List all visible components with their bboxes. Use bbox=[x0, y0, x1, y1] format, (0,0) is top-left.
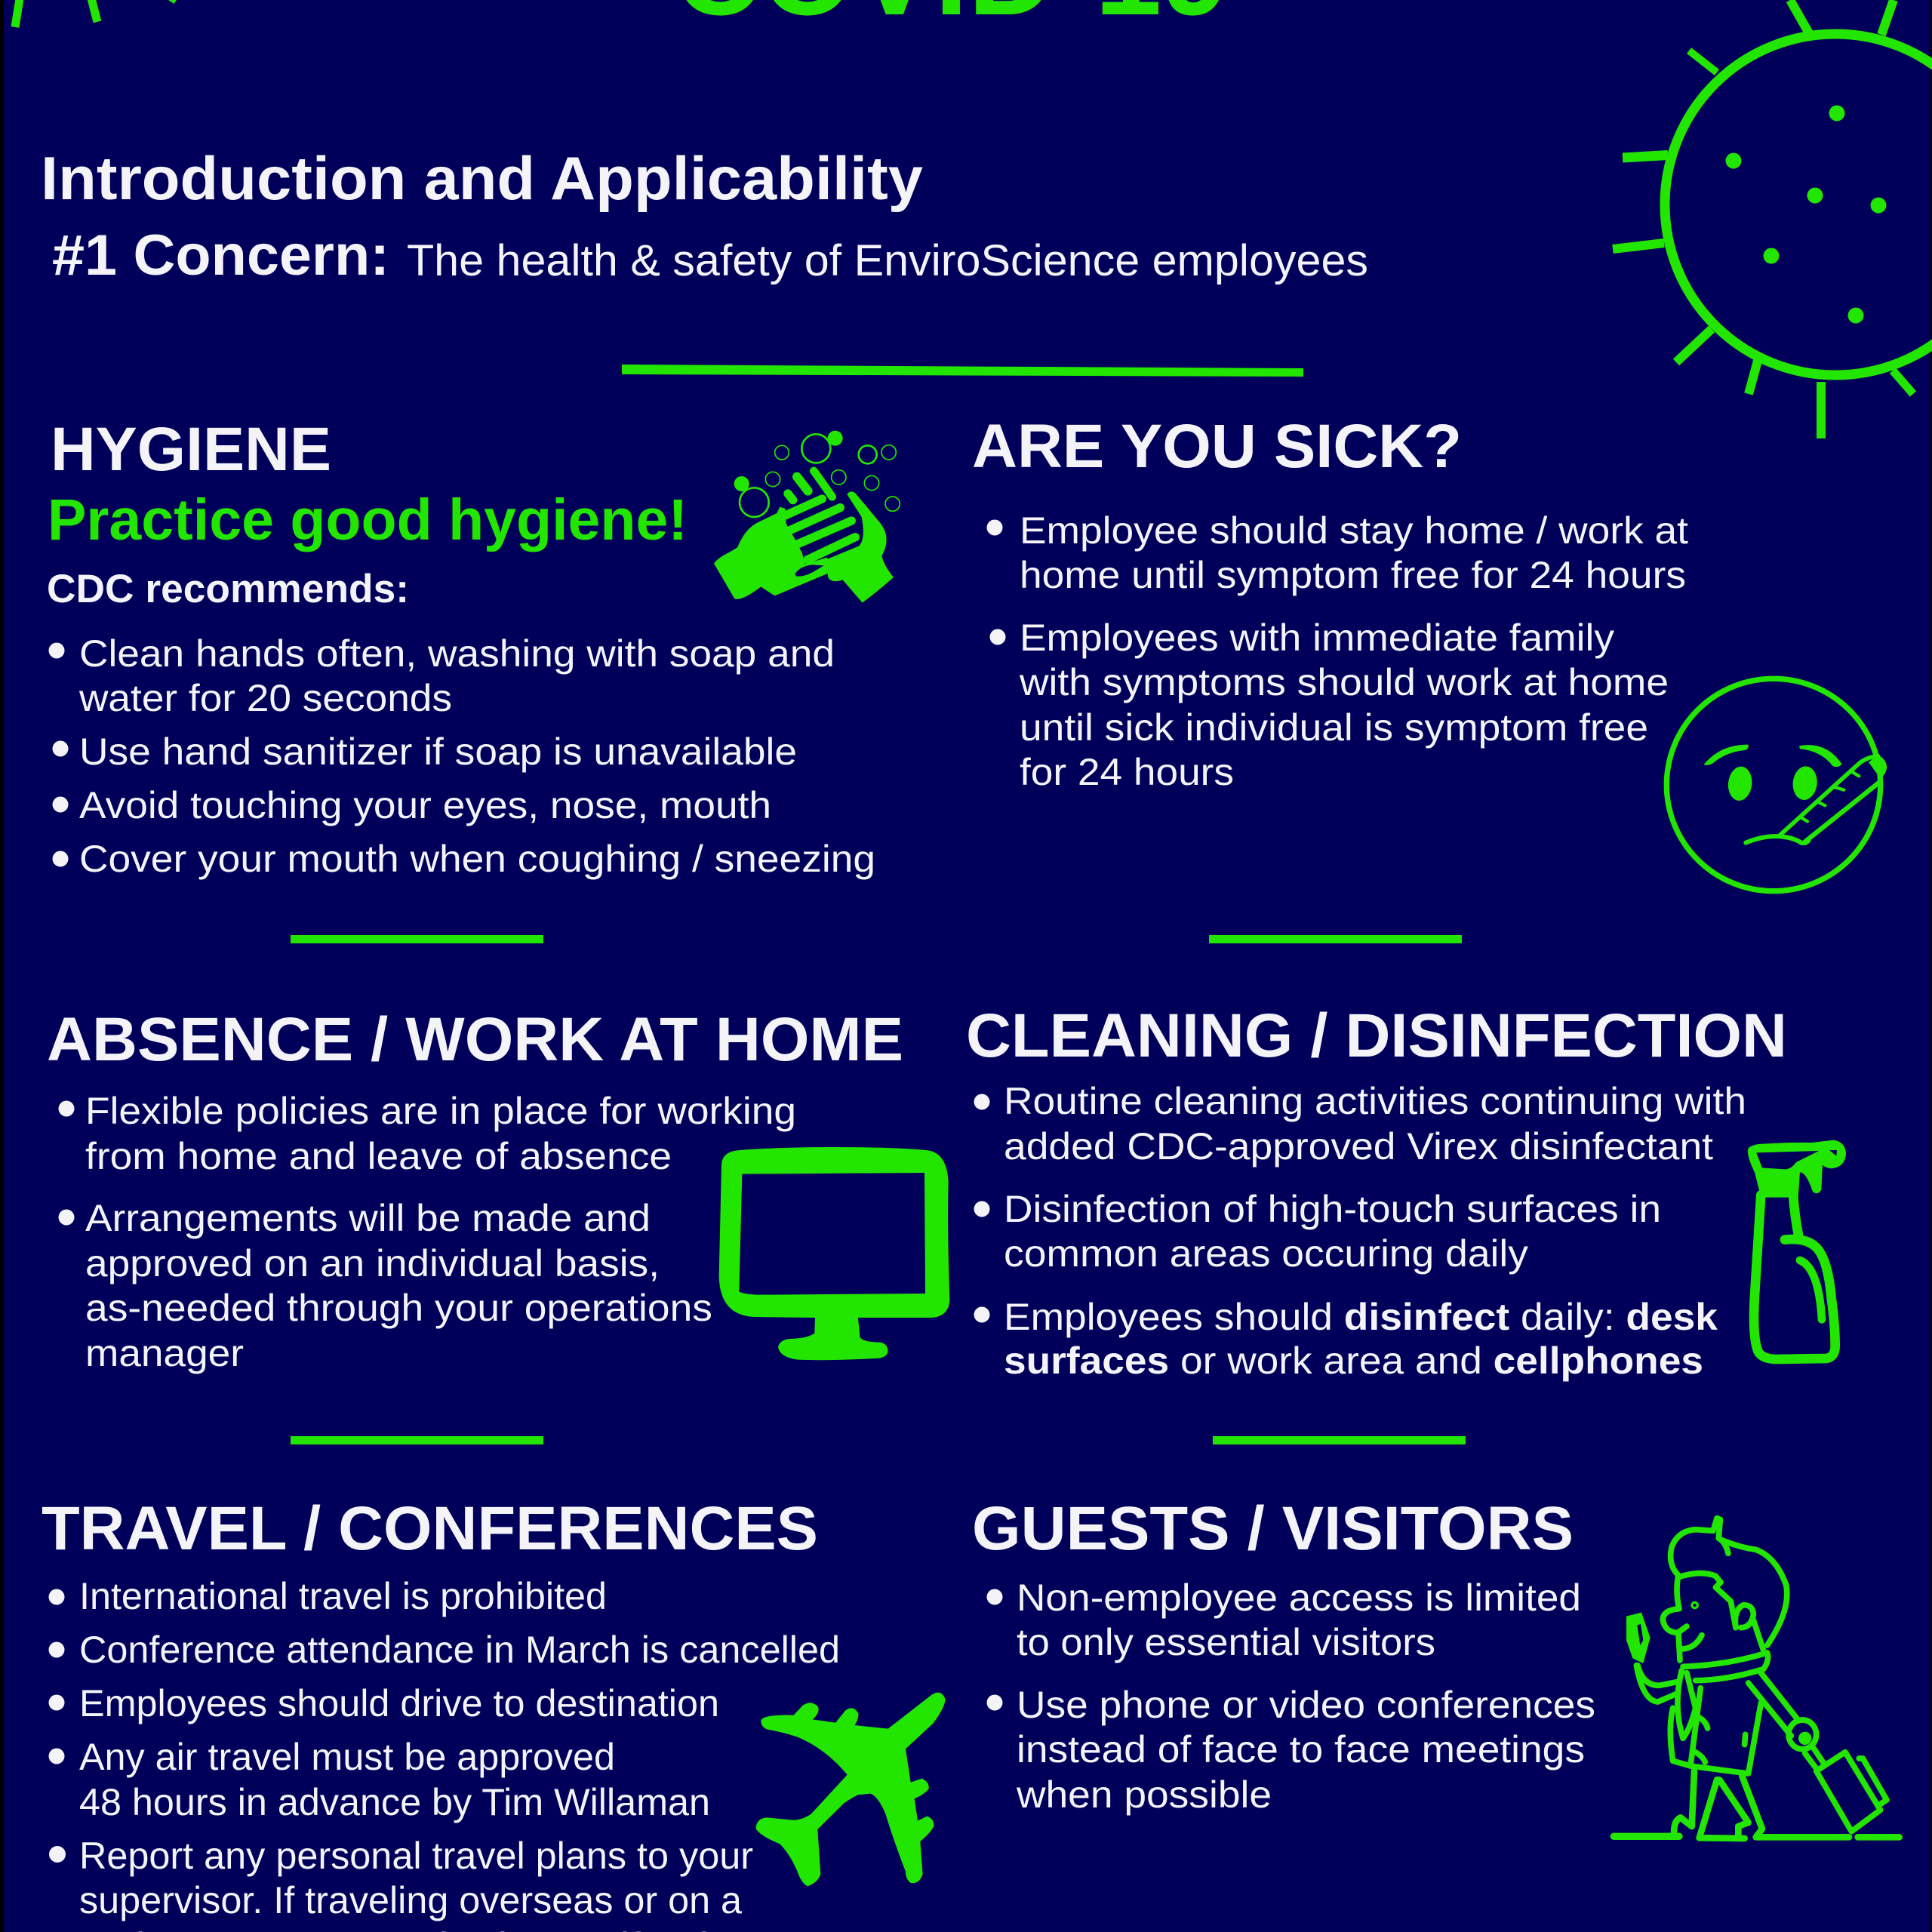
divider left row 2 bbox=[291, 1436, 543, 1444]
intro heading: Introduction and Applicability bbox=[41, 145, 923, 213]
absence list: Flexible policies are in place for working bbox=[85, 1090, 796, 1132]
hygiene subheading: Practice good hygiene! bbox=[48, 488, 688, 552]
divider right row 2 bbox=[1213, 1436, 1466, 1444]
icon: virus top left bbox=[15, 0, 174, 27]
panel: hygiene bbox=[47, 415, 900, 880]
panel: guests / visitors bbox=[972, 1494, 1900, 1838]
icon: spray bottle bbox=[1748, 1140, 1846, 1359]
icon: sick face with thermometer bbox=[1666, 678, 1887, 891]
cleaning heading: CLEANING / DISINFECTION bbox=[966, 1001, 1787, 1070]
travel list bbox=[48, 1575, 840, 1932]
icon: computer monitor bbox=[719, 1147, 949, 1360]
divider right row 1 bbox=[1209, 935, 1462, 943]
absence list: from home and leave of absence bbox=[85, 1135, 672, 1177]
hygiene heading: HYGIENE bbox=[51, 415, 331, 484]
cleaning list: surfaces or work area and cellphones bbox=[1004, 1340, 1703, 1382]
cleaning list: common areas occuring daily bbox=[1004, 1232, 1528, 1275]
travel heading: TRAVEL / CONFERENCES bbox=[42, 1494, 818, 1563]
absence list: manager bbox=[85, 1332, 244, 1374]
guests list: Use phone or video conferences bbox=[1017, 1684, 1595, 1726]
sick list: for 24 hours bbox=[1020, 751, 1234, 793]
travel list: International travel is prohibited bbox=[79, 1575, 607, 1617]
hygiene list: water for 20 seconds bbox=[78, 677, 452, 719]
panel: absence / work at home bbox=[47, 1005, 949, 1374]
panel: travel / conferences bbox=[42, 1494, 946, 1932]
guests list: instead of face to face meetings bbox=[1017, 1728, 1585, 1770]
cleaning list: Disinfection of high-touch surfaces in bbox=[1004, 1188, 1661, 1230]
cleaning list: Employees should disinfect daily: desk bbox=[1004, 1296, 1718, 1338]
sick heading: ARE YOU SICK? bbox=[972, 412, 1462, 481]
absence list: approved on an individual basis, bbox=[85, 1242, 660, 1284]
guests list: Non-employee access is limited bbox=[1017, 1577, 1581, 1619]
hygiene list: Avoid touching your eyes, nose, mouth bbox=[79, 784, 771, 826]
cdc label: CDC recommends: bbox=[47, 567, 409, 611]
guests list: to only essential visitors bbox=[1017, 1621, 1435, 1663]
icon: airplane bbox=[756, 1693, 946, 1886]
right hand bbox=[827, 491, 894, 603]
travel list: 48 hours in advance by Tim Willaman bbox=[79, 1781, 710, 1823]
cleaning list: Routine cleaning activities continuing with bbox=[1004, 1080, 1746, 1122]
travel list: Employees should drive to destination bbox=[79, 1682, 719, 1724]
hygiene list: Use hand sanitizer if soap is unavailable bbox=[79, 731, 797, 773]
concern label: #1 Concern: bbox=[52, 223, 389, 288]
concern text: The health & safety of EnviroScience employees bbox=[407, 236, 1368, 285]
sick list: until sick individual is symptom free bbox=[1020, 706, 1648, 749]
sick list: home until symptom free for 24 hours bbox=[1020, 554, 1686, 596]
icon: traveler with suitcase bbox=[1614, 1518, 1900, 1838]
travel list: supervisor. If traveling overseas or on a bbox=[79, 1879, 742, 1921]
cleaning list: added CDC-approved Virex disinfectant bbox=[1004, 1125, 1713, 1168]
divider left row 1 bbox=[291, 935, 543, 943]
hygiene list: Clean hands often, washing with soap and bbox=[79, 632, 835, 675]
divider top bbox=[622, 365, 1303, 377]
sick list bbox=[987, 509, 1688, 793]
absence list: as-needed through your operations bbox=[85, 1287, 712, 1329]
absence list: Arrangements will be made and bbox=[85, 1197, 651, 1239]
travel list: Any air travel must be approved bbox=[79, 1736, 615, 1778]
icon: washing hands bbox=[714, 431, 900, 603]
hygiene list: Cover your mouth when coughing / sneezing bbox=[79, 838, 875, 880]
guests list: when possible bbox=[1016, 1774, 1272, 1816]
sick list: Employees with immediate family bbox=[1020, 617, 1614, 659]
travel list: Report any personal travel plans to your bbox=[79, 1835, 753, 1877]
guests list bbox=[987, 1577, 1595, 1816]
absence heading: ABSENCE / WORK AT HOME bbox=[47, 1005, 903, 1074]
icon: virus top right bbox=[1613, 0, 1932, 438]
hygiene list bbox=[48, 632, 875, 880]
panel: cleaning / disinfection bbox=[966, 1001, 1846, 1382]
absence list bbox=[59, 1090, 796, 1374]
guests heading: GUESTS / VISITORS bbox=[972, 1494, 1574, 1563]
travel list: Conference attendance in March is cancelled bbox=[79, 1629, 840, 1671]
cleaning list bbox=[974, 1080, 1746, 1382]
sick list: with symptoms should work at home bbox=[1019, 661, 1669, 703]
sick list: Employee should stay home / work at bbox=[1020, 509, 1688, 552]
left hand palm bbox=[714, 507, 830, 599]
panel: introduction bbox=[41, 145, 1368, 288]
panel: are you sick bbox=[972, 412, 1887, 891]
